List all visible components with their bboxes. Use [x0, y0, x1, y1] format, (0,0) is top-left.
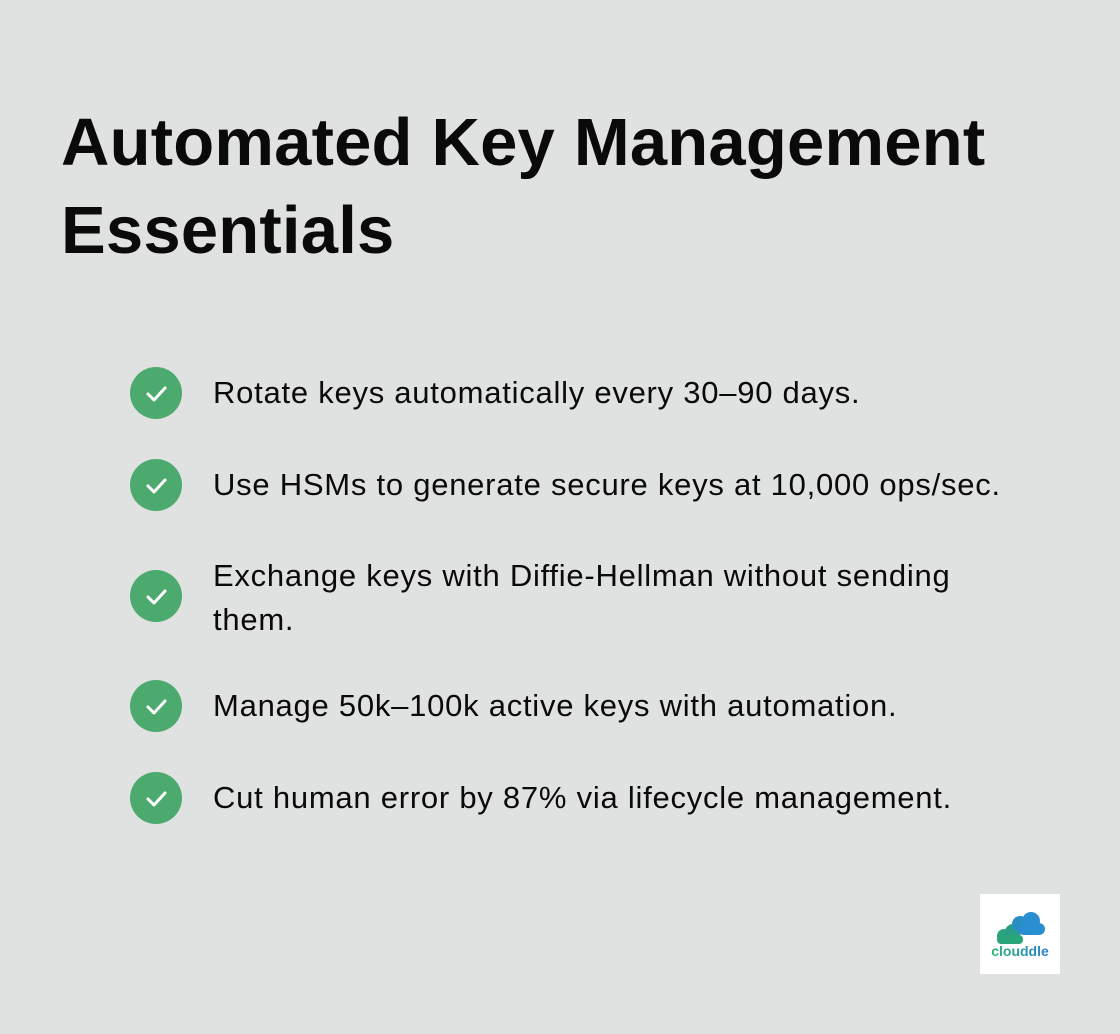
item 2: [130, 459, 1001, 511]
item 3: Exchange keys with Diffie-Hellman without sending: [213, 558, 950, 593]
item 3: [130, 558, 950, 637]
item 1: Rotate keys automatically every 30–90 days.: [213, 375, 860, 410]
logo: [980, 894, 1060, 974]
item 5: [130, 772, 952, 824]
logo: clouddle: [991, 943, 1049, 959]
item 4: [130, 680, 897, 732]
item 4: Manage 50k–100k active keys with automation.: [213, 688, 897, 723]
item 3: them.: [213, 602, 294, 637]
title: [61, 105, 985, 268]
item 2: Use HSMs to generate secure keys at 10,000 ops/sec.: [213, 467, 1001, 502]
item 1: [130, 367, 860, 419]
item 5: Cut human error by 87% via lifecycle management.: [213, 780, 952, 815]
title: Automated Key Management: [61, 105, 985, 180]
title: Essentials: [61, 193, 394, 268]
